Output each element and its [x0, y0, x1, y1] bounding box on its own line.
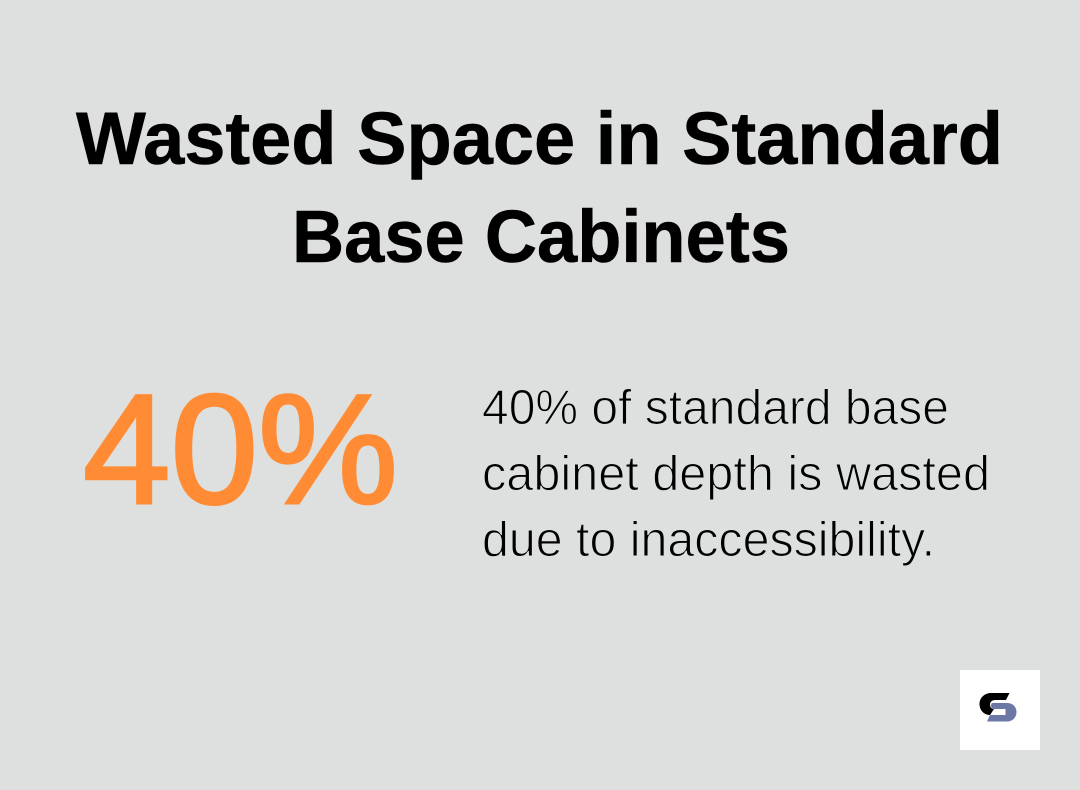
description text: due to inaccessibility. — [482, 513, 935, 567]
title — [76, 97, 1003, 278]
logo badge — [960, 670, 1040, 750]
big statistic: 40%: 40% — [83, 363, 398, 537]
description text: 40% of standard base — [482, 381, 949, 435]
title: Wasted Space in Standard — [76, 97, 1003, 180]
title: Base Cabinets — [292, 195, 790, 278]
description text: cabinet depth is wasted — [482, 447, 990, 501]
description text — [482, 381, 990, 567]
